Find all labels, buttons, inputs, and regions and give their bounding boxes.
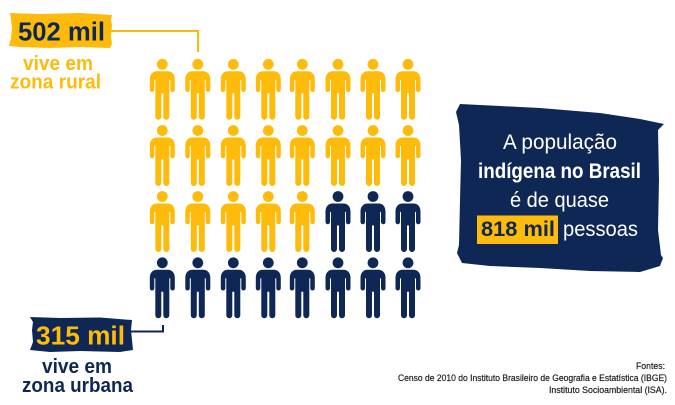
sources: Censo de 2010 do Instituto Brasileiro de Geografia e Estatística (IBGE)	[398, 373, 667, 383]
pictogram: 32 people	[150, 59, 421, 318]
text: pessoas: pessoas	[563, 218, 638, 241]
label: vive em zona rural: zona rural	[10, 72, 101, 94]
sources: Instituto Socioambiental (ISA).	[549, 385, 667, 395]
label: vive em zona rural: vive em	[23, 53, 93, 75]
yellow figures: rural population	[150, 59, 421, 252]
label: vive em zona urbana: vive em	[42, 356, 112, 378]
value: 315 mil: 315 mil	[36, 322, 125, 350]
sources: Fontes:	[636, 361, 665, 371]
connector line: rural	[108, 31, 198, 52]
text: indígena no Brasil: indígena no Brasil	[478, 160, 641, 183]
text: é de quase: é de quase	[510, 189, 609, 212]
connector line: urban	[130, 325, 163, 332]
navy figures: urban population	[150, 191, 421, 318]
brush badge: urban	[30, 317, 133, 352]
callout: urban	[22, 317, 163, 397]
sources	[398, 361, 667, 395]
label: vive em zona urbana: zona urbana	[22, 375, 134, 397]
callout: rural	[9, 13, 198, 94]
brush badge: rural	[9, 13, 112, 48]
value: 502 mil: 502 mil	[18, 18, 105, 46]
text: A população: A população	[503, 131, 617, 154]
panel: total population	[456, 104, 664, 272]
highlight: 818 mil: 818 mil	[481, 217, 555, 241]
brush background	[456, 104, 664, 272]
